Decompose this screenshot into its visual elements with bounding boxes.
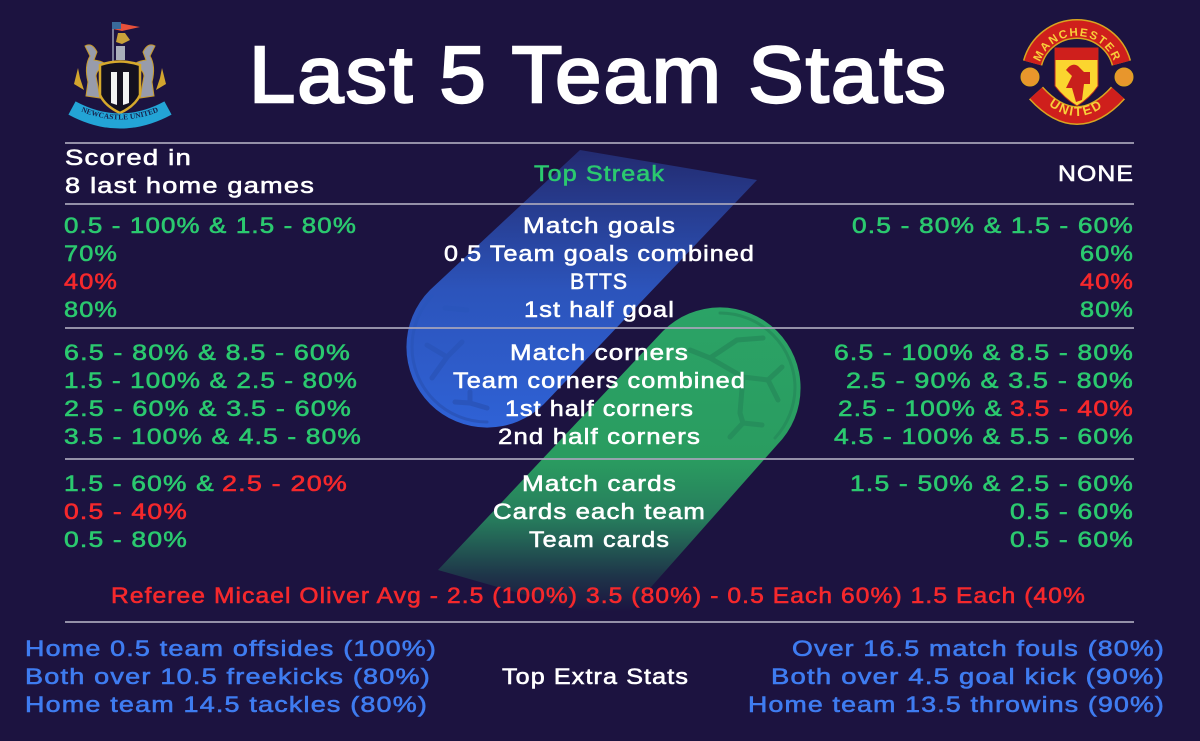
shield bbox=[100, 62, 140, 113]
dividers bbox=[65, 143, 1134, 622]
section: top extra stats: Top Extra Stats bbox=[502, 664, 689, 689]
section: corners: 2nd half corners bbox=[498, 424, 701, 449]
section: top extra stats: Both over 4.5 goal kick (90%) bbox=[771, 664, 1165, 689]
section: cards: 0.5 - 60% bbox=[1010, 499, 1134, 524]
section: top streak: Scored in bbox=[65, 145, 192, 170]
section: cards: Match cards bbox=[522, 471, 677, 496]
section: goals: Match goals bbox=[523, 213, 676, 238]
section: goals: 40% bbox=[1080, 269, 1134, 294]
section: top extra stats: Home team 14.5 tackles (80%) bbox=[25, 692, 428, 717]
section: goals: 70% bbox=[64, 241, 118, 266]
section: corners: 3.5 - 40% bbox=[1010, 396, 1134, 421]
section: goals: 0.5 Team goals combined bbox=[444, 241, 755, 266]
section: goals: 0.5 - 80% & 1.5 - 60% bbox=[852, 213, 1134, 238]
section: corners: Match corners bbox=[510, 340, 689, 365]
section: top streak: 8 last home games bbox=[65, 173, 315, 198]
section: goals: 60% bbox=[1080, 241, 1134, 266]
section: corners: 2.5 - 60% & 3.5 - 60% bbox=[64, 396, 352, 421]
section: goals: 80% bbox=[1080, 297, 1134, 322]
section: cards bbox=[64, 471, 1134, 552]
section: goals bbox=[64, 213, 1134, 322]
section: cards: 1.5 - 50% & 2.5 - 60% bbox=[850, 471, 1134, 496]
section: top extra stats bbox=[25, 636, 1165, 717]
section: cards: Cards each team bbox=[493, 499, 706, 524]
section: top extra stats: Over 16.5 match fouls (80%) bbox=[792, 636, 1165, 661]
seahorses bbox=[74, 45, 166, 98]
side balls bbox=[1021, 68, 1133, 86]
shield bbox=[1055, 48, 1098, 106]
section: cards: Team cards bbox=[529, 527, 670, 552]
section: goals: 0.5 - 100% & 1.5 - 80% bbox=[64, 213, 357, 238]
section: corners: 2.5 - 90% & 3.5 - 80% bbox=[846, 368, 1134, 393]
section: goals: 1st half goal bbox=[524, 297, 675, 322]
section: corners: 4.5 - 100% & 5.5 - 60% bbox=[834, 424, 1134, 449]
section: corners: 1st half corners bbox=[505, 396, 694, 421]
section: cards: 1.5 - 60% & bbox=[64, 471, 215, 496]
section: corners: 2.5 - 100% & bbox=[838, 396, 1003, 421]
decorative logo: blue ball pill bbox=[406, 150, 757, 428]
crest: Newcastle United bbox=[68, 22, 172, 128]
section: top streak: NONE bbox=[1058, 161, 1134, 186]
section: corners: 1.5 - 100% & 2.5 - 80% bbox=[64, 368, 358, 393]
section: cards: 0.5 - 60% bbox=[1010, 527, 1134, 552]
section: top extra stats: Home 0.5 team offsides (100%) bbox=[25, 636, 437, 661]
referee note: Referee Micael Oliver Avg - 2.5 (100%) 3.5 (80%) - 0.5 Each 60%) 1.5 Each (40% bbox=[111, 583, 1086, 608]
section: goals: BTTS bbox=[570, 269, 628, 294]
section: top extra stats: Home team 13.5 throwins (90%) bbox=[748, 692, 1165, 717]
flag bbox=[112, 22, 140, 62]
section: cards: 0.5 - 80% bbox=[64, 527, 188, 552]
section: top streak bbox=[65, 145, 1134, 198]
section: corners: Team corners combined bbox=[453, 368, 746, 393]
ribbon: NEWCASTLE UNITED bbox=[81, 106, 158, 120]
section: corners bbox=[64, 340, 1134, 449]
section: goals: 40% bbox=[64, 269, 118, 294]
section: corners: 6.5 - 100% & 8.5 - 80% bbox=[834, 340, 1134, 365]
section: top streak: Top Streak bbox=[534, 161, 665, 186]
decorative logo: green ball pill bbox=[438, 307, 801, 622]
section: cards: 2.5 - 20% bbox=[222, 471, 348, 496]
bottom banner: UNITED bbox=[1050, 98, 1100, 116]
crest: Manchester United bbox=[1020, 19, 1134, 125]
section: corners: 6.5 - 80% & 8.5 - 60% bbox=[64, 340, 351, 365]
section: cards: 0.5 - 40% bbox=[64, 499, 188, 524]
title: Last 5 Team Stats bbox=[249, 30, 948, 119]
section: corners: 3.5 - 100% & 4.5 - 80% bbox=[64, 424, 362, 449]
section: goals: 80% bbox=[64, 297, 118, 322]
section: top extra stats: Both over 10.5 freekicks (80%) bbox=[25, 664, 431, 689]
top banner: MANCHESTER bbox=[1033, 28, 1120, 62]
